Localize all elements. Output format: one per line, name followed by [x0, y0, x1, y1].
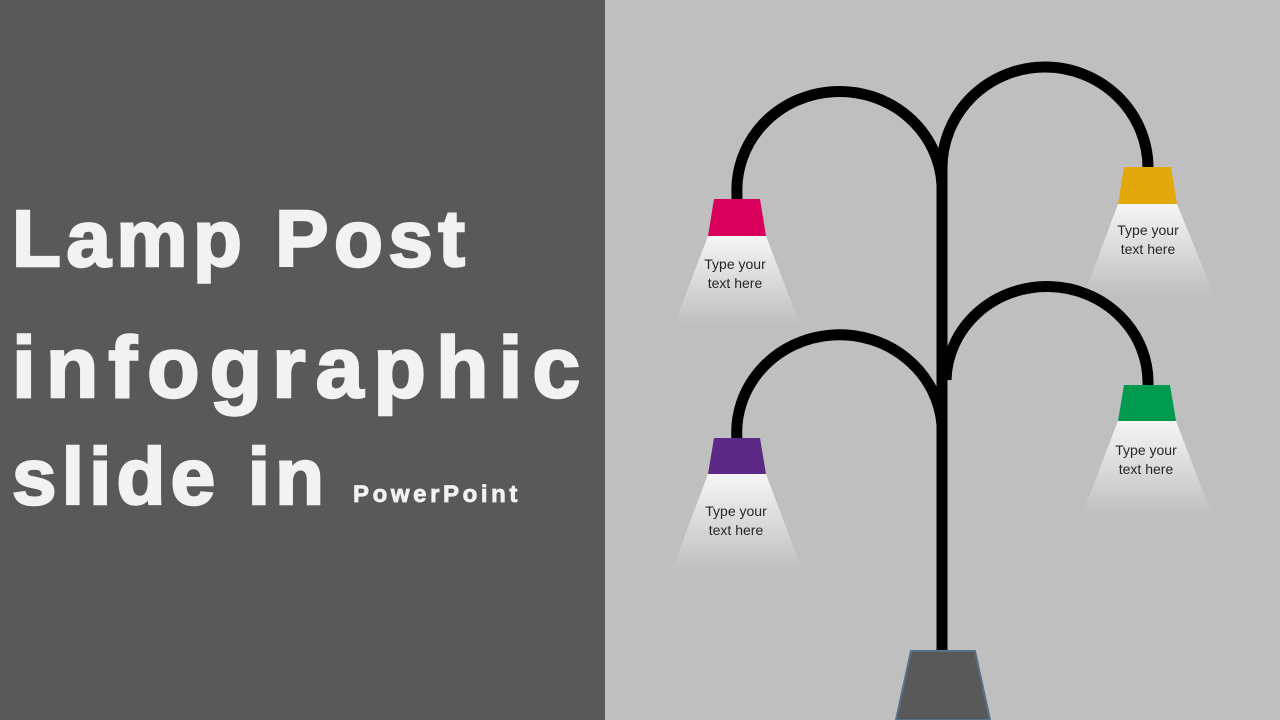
- lamp: green: Type your: [1115, 442, 1177, 458]
- title line 3: [12, 432, 521, 521]
- lamp: purple: Type your: [705, 503, 767, 519]
- lamp: pink: Type your: [704, 256, 766, 272]
- title line 2: infographic: [12, 320, 590, 416]
- lamp: gold: text here: [1121, 241, 1175, 257]
- title line 3: slide in: [12, 432, 329, 521]
- lamp: purple: [672, 438, 802, 570]
- lamp: green: [1082, 385, 1212, 515]
- lamp: pink: [674, 199, 800, 325]
- lamp: green: text here: [1119, 461, 1173, 477]
- lamp: gold: [1084, 167, 1214, 295]
- panel: left title area: [0, 0, 605, 720]
- base: [896, 651, 990, 720]
- pole and arms: [737, 67, 1148, 655]
- lamp: purple: text here: [709, 522, 763, 538]
- title line 1: Lamp Post: [12, 194, 470, 283]
- lamp: pink: text here: [708, 275, 762, 291]
- lamp: gold: Type your: [1117, 222, 1179, 238]
- panel: left title area: PowerPoint: [353, 481, 521, 508]
